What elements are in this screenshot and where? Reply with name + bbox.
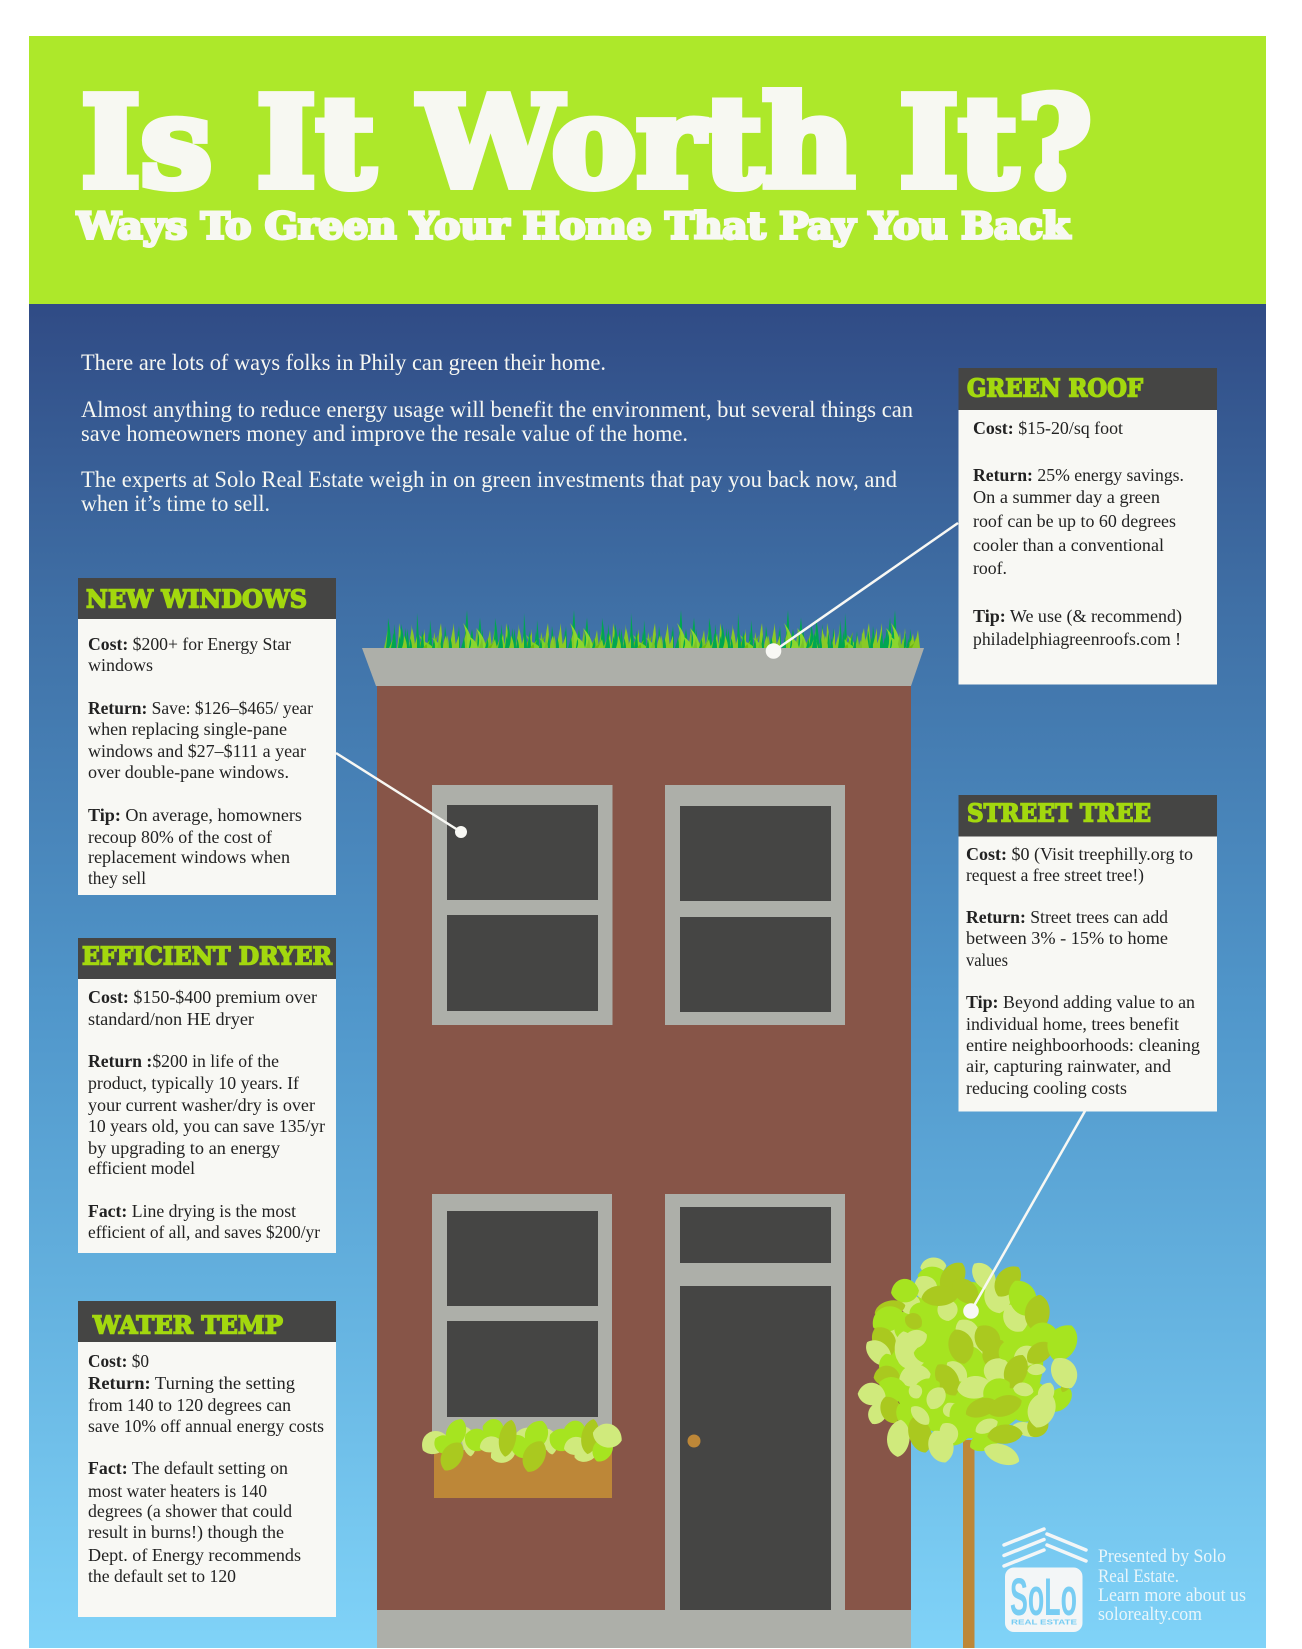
- heading: efficient dryer: [78, 938, 336, 979]
- new windows details: windows: [88, 655, 153, 675]
- heading: new windows: [78, 578, 336, 619]
- new windows details: they sell: [88, 868, 146, 888]
- panel: new windows: [78, 578, 336, 895]
- planter leaves: [417, 1416, 625, 1476]
- heading: street tree: [958, 795, 1217, 836]
- green roof details: Tip: We use (& recommend): [973, 606, 1182, 627]
- street tree details: values: [966, 950, 1008, 970]
- efficient dryer details: 10 years old, you can save 135/yr: [88, 1116, 325, 1136]
- presented by text: Real Estate.: [1098, 1567, 1179, 1587]
- illustration: rowhouse: [362, 610, 924, 1648]
- water temp details: save 10% off annual energy costs: [88, 1416, 324, 1436]
- presented by text: solorealty.com: [1098, 1605, 1203, 1625]
- heading: new windows: NEW WINDOWS: [86, 584, 307, 614]
- heading: water temp: WATER TEMP: [92, 1310, 283, 1340]
- blue sky gradient background: [29, 304, 1266, 1648]
- new windows details: over double-pane windows.: [88, 762, 289, 782]
- green roof details: [973, 418, 1184, 649]
- green roof details: roof can be up to 60 degrees: [973, 511, 1176, 531]
- roof cornice: [362, 648, 924, 686]
- efficient dryer details: efficient model: [88, 1158, 195, 1178]
- street tree details: [966, 844, 1200, 1098]
- street tree: [857, 1256, 1083, 1648]
- water temp details: [88, 1351, 324, 1586]
- street tree details: Tip: Beyond adding value to an: [966, 992, 1195, 1012]
- green roof details: Cost: $15-20/sq foot: [973, 418, 1123, 438]
- intro text block: The experts at Solo Real Estate weigh in on green investments that pay you back now, and: [81, 467, 897, 492]
- panel: street tree: [958, 795, 1217, 1112]
- green roof details: philadelphiagreenroofs.com !: [973, 629, 1181, 649]
- street tree details: Return: Street trees can add: [966, 907, 1168, 927]
- water temp details: from 140 to 120 degrees can: [88, 1395, 291, 1415]
- efficient dryer details: product, typically 10 years. If: [88, 1073, 299, 1093]
- callout line: green roof: [766, 523, 958, 659]
- efficient dryer details: Return :$200 in life of the: [88, 1051, 279, 1071]
- efficient dryer details: your current washer/dry is over: [88, 1095, 315, 1115]
- efficient dryer details: by upgrading to an energy: [88, 1138, 280, 1158]
- heading: street tree: STREET TREE: [967, 798, 1151, 828]
- green roof details: On a summer day a green: [973, 487, 1160, 507]
- subtitle: Ways To Green Your Home That Pay You Back: [76, 206, 1071, 248]
- new windows details: windows and $27–$111 a year: [88, 741, 306, 761]
- icon: roof chevrons: [1004, 1529, 1086, 1566]
- sidewalk: [377, 1610, 911, 1648]
- panel: water temp: [78, 1301, 336, 1617]
- intro text block: save homeowners money and improve the resale value of the home.: [81, 421, 688, 446]
- green title banner: [29, 36, 1266, 304]
- logo: Solo Real Estate: [1004, 1529, 1086, 1632]
- new windows details: replacement windows when: [88, 847, 290, 867]
- water temp details: degrees (a shower that could: [88, 1501, 292, 1522]
- street tree details: request a free street tree!): [966, 865, 1144, 886]
- heading: green roof: GREEN ROOF: [967, 374, 1144, 402]
- efficient dryer details: Fact: Line drying is the most: [88, 1201, 296, 1221]
- water temp details: the default set to 120: [88, 1566, 236, 1586]
- tree trunk: [963, 1440, 974, 1648]
- brick facade: [377, 685, 911, 1611]
- green roof details: cooler than a conventional: [973, 535, 1164, 555]
- efficient dryer details: Cost: $150-$400 premium over: [88, 987, 317, 1007]
- window planter box: [434, 1450, 612, 1498]
- water temp details: Return: Turning the setting: [88, 1373, 295, 1393]
- new windows details: Tip: On average, homowners: [88, 805, 302, 825]
- callout line: new windows: [336, 753, 467, 838]
- street tree details: Cost: $0 (Visit treephilly.org to: [966, 844, 1193, 865]
- panel: efficient dryer: [78, 938, 336, 1253]
- callout line: street tree: [963, 1111, 1085, 1319]
- presented by text: Presented by Solo: [1098, 1547, 1226, 1567]
- water temp details: Dept. of Energy recommends: [88, 1545, 301, 1565]
- street tree details: individual home, trees benefit: [966, 1014, 1179, 1034]
- panel: green roof: [958, 368, 1217, 684]
- presented by text: [1098, 1547, 1246, 1625]
- intro text block: Almost anything to reduce energy usage will benefit the environment, but several things can: [81, 397, 913, 422]
- logo badge: [1005, 1568, 1082, 1632]
- title: Is It Worth It?: [81, 70, 1092, 216]
- water temp details: most water heaters is 140: [88, 1481, 267, 1501]
- efficient dryer details: [88, 987, 325, 1242]
- logo tagline: REAL ESTATE: [1011, 1618, 1077, 1626]
- intro text block: when it’s time to sell.: [81, 491, 270, 516]
- street tree details: air, capturing rainwater, and: [966, 1056, 1171, 1076]
- water temp details: Fact: The default setting on: [88, 1458, 288, 1478]
- door knob: [688, 1434, 700, 1448]
- street tree details: reducing cooling costs: [966, 1078, 1127, 1098]
- new windows details: Cost: $200+ for Energy Star: [88, 634, 291, 654]
- door with transom: [665, 1194, 845, 1611]
- new windows details: [88, 634, 313, 888]
- new windows details: recoup 80% of the cost of: [88, 827, 272, 847]
- green roof details: roof.: [973, 558, 1007, 578]
- heading: efficient dryer: EFFICIENT DRYER: [82, 942, 333, 970]
- water temp details: result in burns!) though the: [88, 1522, 284, 1543]
- street tree details: entire neighboorhoods: cleaning: [966, 1035, 1200, 1055]
- efficient dryer details: standard/non HE dryer: [88, 1009, 254, 1029]
- logo wordmark: SoLo: [1010, 1568, 1077, 1627]
- presented by text: Learn more about us: [1098, 1586, 1246, 1606]
- intro text block: There are lots of ways folks in Phily can green their home.: [81, 350, 606, 375]
- intro text block: [81, 350, 913, 516]
- upper right window: [665, 785, 845, 1025]
- upper left window: [432, 785, 612, 1025]
- water temp details: Cost: $0: [88, 1351, 149, 1371]
- tree foliage: [857, 1256, 1083, 1470]
- heading: green roof: [958, 368, 1217, 410]
- new windows details: when replacing single-pane: [88, 719, 287, 739]
- street tree details: between 3% - 15% to home: [966, 928, 1168, 948]
- new windows details: Return: Save: $126–$465/ year: [88, 698, 313, 718]
- green roof details: Return: 25% energy savings.: [973, 465, 1184, 485]
- efficient dryer details: efficient of all, and saves $200/yr: [88, 1222, 320, 1242]
- roof grass: [384, 610, 920, 648]
- lower left window: [432, 1194, 612, 1450]
- heading: water temp: [78, 1301, 336, 1342]
